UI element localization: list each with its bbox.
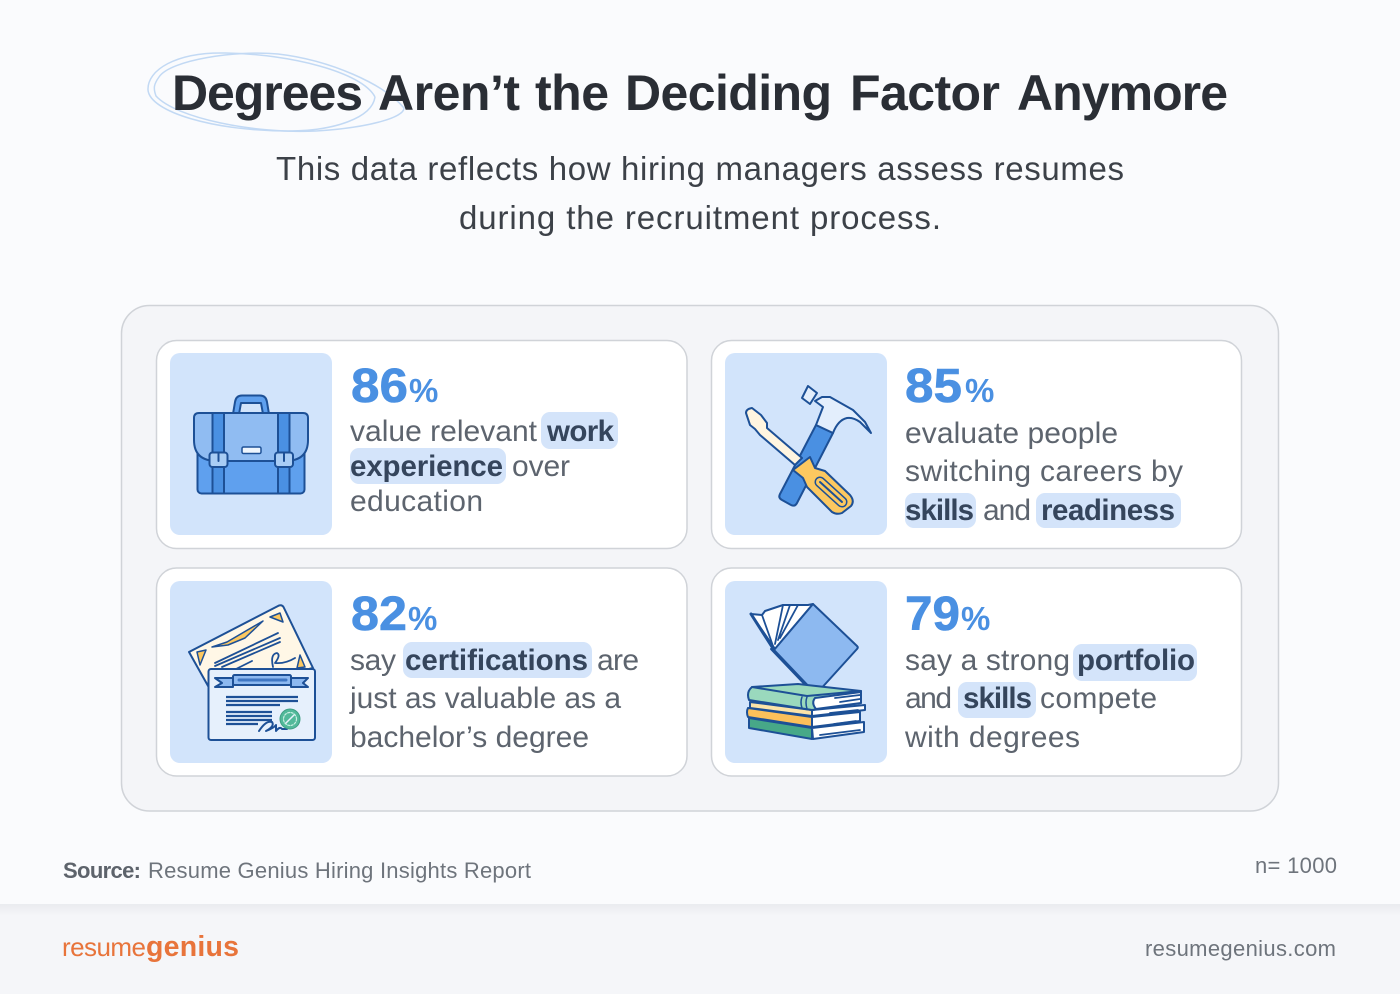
logo: resume xyxy=(62,932,146,962)
subtitle xyxy=(276,150,1124,236)
title: the xyxy=(535,65,609,121)
title xyxy=(172,65,1228,121)
description: skills and readiness xyxy=(905,417,1183,528)
description: portfolio and skills xyxy=(904,644,1197,754)
description: work experience xyxy=(350,412,618,518)
description: certifications: just as valuable as a xyxy=(349,682,621,715)
subtitle: during the recruitment process. xyxy=(459,199,941,236)
sample size: n= 1000 xyxy=(1255,853,1337,878)
icon: briefcase xyxy=(194,396,308,494)
description: work experience: work xyxy=(546,415,615,448)
description: skills and readiness: skills xyxy=(905,494,974,527)
logo xyxy=(62,931,239,963)
source note: Resume Genius Hiring Insights Report xyxy=(148,858,531,883)
description: work experience: experience xyxy=(350,450,503,483)
footer bar xyxy=(0,904,1400,994)
description: portfolio and skills: with degrees xyxy=(904,721,1080,754)
stat: 82%: % xyxy=(408,600,437,637)
title: Anymore xyxy=(1017,65,1228,121)
description: portfolio and skills: skills xyxy=(963,682,1032,715)
description: portfolio and skills: compete xyxy=(1040,682,1157,715)
title: Deciding xyxy=(625,65,832,121)
card: portfolio and skills 79% xyxy=(712,568,1242,776)
description: work experience: over xyxy=(512,450,570,483)
description: certifications: are xyxy=(597,644,639,677)
stat: 86%: 86 xyxy=(351,360,408,413)
title: Degrees xyxy=(172,65,363,121)
title scribble circle xyxy=(148,53,404,131)
description: work experience: value relevant xyxy=(350,415,538,448)
stat: 85%: 85 xyxy=(905,360,962,413)
description: skills and readiness: and xyxy=(983,494,1031,527)
logo: genius xyxy=(146,931,239,963)
description: certifications xyxy=(349,642,639,754)
card: certifications 82% xyxy=(156,568,687,776)
card: career switchers 85% xyxy=(712,340,1242,548)
description: certifications: say xyxy=(350,644,396,677)
title: Aren’t xyxy=(378,65,520,121)
website: resumegenius.com xyxy=(1145,936,1336,961)
panel: statistics xyxy=(122,306,1278,811)
description: portfolio and skills: say a strong xyxy=(905,644,1070,677)
description: portfolio and skills: portfolio xyxy=(1077,644,1195,677)
stat: 82% xyxy=(351,588,437,641)
stat: 79%: 79 xyxy=(905,588,960,641)
icon: stack of books xyxy=(747,604,865,739)
stat: 86%: % xyxy=(409,372,438,409)
icon: hammer and screwdriver xyxy=(746,386,871,514)
stat: 79%: % xyxy=(961,600,990,637)
icon: certificates xyxy=(189,605,315,740)
description: skills and readiness: readiness xyxy=(1041,494,1175,527)
source note: Source: xyxy=(63,858,141,883)
stat: 85%: % xyxy=(965,372,994,409)
subtitle: This data reflects how hiring managers assess resumes xyxy=(276,150,1124,187)
description: skills and readiness: evaluate people xyxy=(905,417,1118,450)
title: Factor xyxy=(850,65,1000,121)
description: certifications: bachelor’s degree xyxy=(350,721,589,754)
card: work experience 86% xyxy=(156,340,687,548)
description: work experience: education xyxy=(350,485,483,518)
description: portfolio and skills: and xyxy=(905,682,952,715)
stat: 79% xyxy=(905,588,990,641)
stat: 82%: 82 xyxy=(351,588,407,641)
stat: 86% xyxy=(351,360,438,413)
description: skills and readiness: switching careers by xyxy=(905,455,1183,488)
stat: 85% xyxy=(905,360,994,413)
description: certifications: certifications xyxy=(405,644,588,677)
